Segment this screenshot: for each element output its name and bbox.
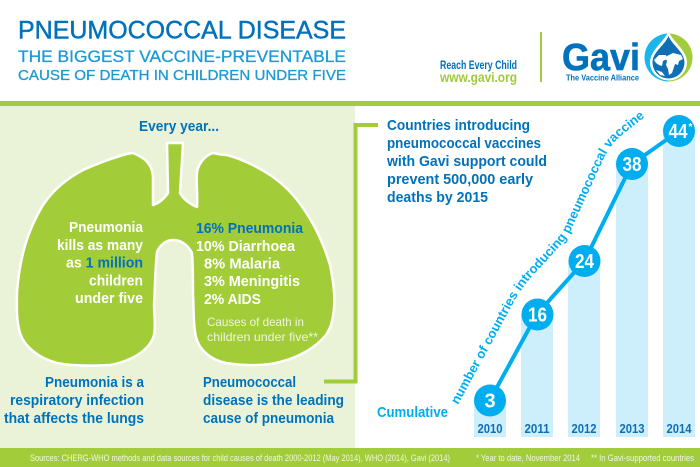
heading: every year: Every year... xyxy=(139,118,219,135)
caption: causes of death: children under five** xyxy=(207,330,318,344)
bars xyxy=(474,131,695,437)
data values: 16 xyxy=(528,304,547,326)
list: causes of death xyxy=(196,220,304,308)
text: countries introducing: Countries introducing xyxy=(387,117,530,134)
year labels xyxy=(478,421,692,436)
text: countries introducing: pneumococcal vaccines xyxy=(387,135,541,152)
list: causes of death: 8% Malaria xyxy=(204,256,281,272)
year labels: 2011 xyxy=(524,421,550,436)
text: leading cause: disease is the leading xyxy=(203,392,344,409)
text: pneumonia kills xyxy=(57,219,144,307)
list: causes of death: 3% Meningitis xyxy=(204,273,300,290)
caption: causes of death xyxy=(207,315,318,344)
data values xyxy=(484,121,693,412)
axis label: cumulative: Cumulative xyxy=(377,404,448,421)
icon: lungs xyxy=(17,143,334,366)
text: leading cause: cause of pneumonia xyxy=(203,410,335,427)
axis label: curved along trend: number of countries introducing pneumococcal vaccine xyxy=(452,112,644,404)
tagline and url: www.gavi.org xyxy=(439,69,517,85)
data values: 3 xyxy=(484,390,496,412)
list: causes of death: 2% AIDS xyxy=(204,291,261,308)
connector arrow xyxy=(324,125,378,382)
text: pneumonia kills: children xyxy=(89,272,143,290)
list: causes of death: 10% Diarrhoea xyxy=(196,238,296,255)
chart: cumulative countries xyxy=(377,112,695,437)
text: countries introducing xyxy=(386,117,547,206)
year labels: 2012 xyxy=(572,421,596,436)
text: respiratory infection: respiratory infection xyxy=(10,392,144,409)
trend line xyxy=(490,131,679,400)
text: countries introducing: with Gavi support could xyxy=(386,153,547,170)
text: respiratory infection: Pneumonia is a xyxy=(45,374,145,391)
tagline and url: Reach Every Child xyxy=(440,58,517,72)
text: leading cause xyxy=(203,374,344,427)
data points xyxy=(474,115,695,416)
text: countries introducing: deaths by 2015 xyxy=(387,189,488,206)
subtitle line 2: CAUSE OF DEATH IN CHILDREN UNDER FIVE xyxy=(18,68,346,84)
icon: water drop globe xyxy=(644,31,692,82)
year labels: 2010 xyxy=(478,421,502,436)
text: countries introducing: prevent 500,000 early xyxy=(387,171,534,188)
header title block xyxy=(18,16,346,84)
text: respiratory infection: that affects the lungs xyxy=(4,410,144,427)
subtitle line 1: THE BIGGEST VACCINE-PREVENTABLE xyxy=(18,47,346,66)
footer note: year to date: * Year to date, November 2014 xyxy=(476,453,580,464)
caption: causes of death: Causes of death in xyxy=(207,315,304,329)
data values: 44 xyxy=(668,121,688,143)
text: pneumonia kills: kills as many xyxy=(57,237,144,254)
footer xyxy=(0,448,700,467)
data values: 38 xyxy=(622,154,642,176)
logo wordmark: Gavi xyxy=(562,37,640,79)
text: pneumonia kills: Pneumonia xyxy=(69,219,144,236)
text: leading cause: Pneumococcal xyxy=(203,374,296,391)
logo strapline: The Vaccine Alliance xyxy=(566,72,639,82)
footer sources: Sources: CHERG-WHO methods and data sources for child causes of death 2000-2012 (May 2014), WHO (2014), Gavi (2014) xyxy=(30,453,450,464)
title: PNEUMOCOCCAL DISEASE xyxy=(18,16,346,44)
year labels: 2014 xyxy=(666,421,692,436)
data values: * xyxy=(689,122,693,133)
text: pneumonia kills: under five xyxy=(75,290,143,307)
list: causes of death: 16% Pneumonia xyxy=(196,220,304,237)
text: pneumonia kills: as 1 million xyxy=(66,254,143,272)
data values: 24 xyxy=(575,251,595,273)
Gavi logo xyxy=(562,31,692,82)
panel: lungs background xyxy=(0,106,355,448)
year labels: 2013 xyxy=(620,421,644,436)
text: respiratory infection xyxy=(4,374,145,427)
header rule xyxy=(0,101,700,106)
tagline and url xyxy=(439,58,517,85)
